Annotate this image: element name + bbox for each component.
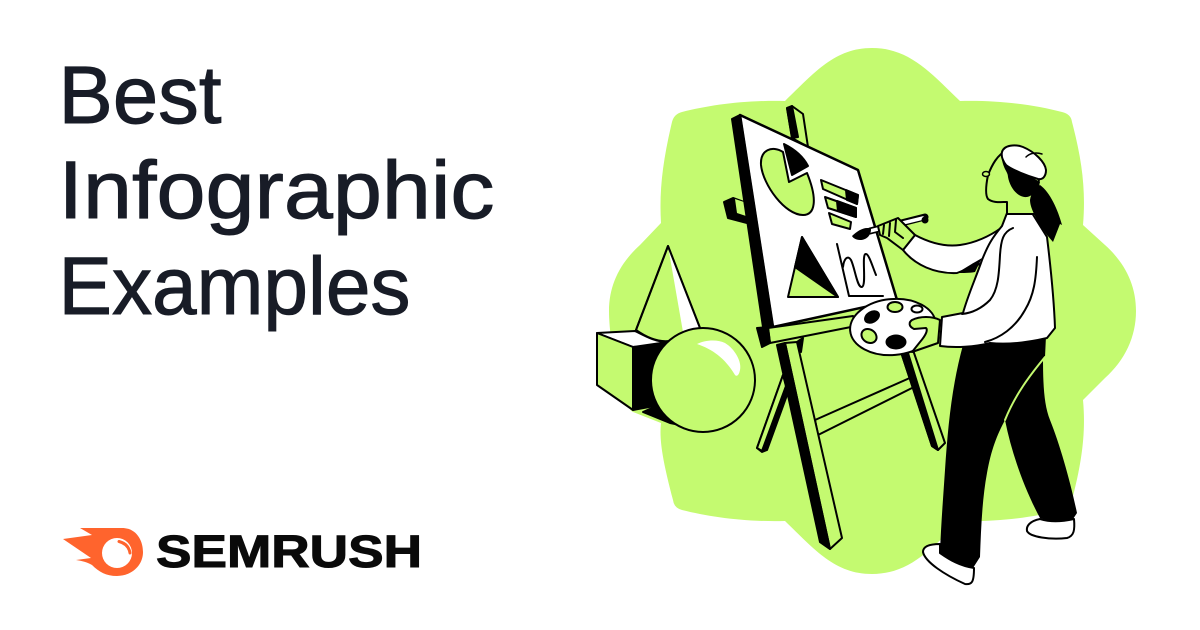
title: Examples	[58, 241, 410, 332]
ponytail	[1030, 185, 1062, 242]
logo: Semrush	[63, 526, 422, 577]
canvas	[732, 115, 897, 327]
paintbrush	[852, 216, 928, 240]
beret	[1002, 145, 1046, 179]
illustration: artist at easel	[597, 106, 1077, 584]
arm with sleeve	[903, 228, 1001, 273]
cube	[597, 331, 680, 425]
trousers	[940, 336, 1077, 568]
line chart	[837, 244, 883, 296]
palette	[848, 295, 938, 359]
hair	[1002, 160, 1040, 197]
sphere	[651, 328, 755, 432]
right easel leg	[902, 350, 945, 450]
easel mast top	[787, 106, 808, 147]
glasses	[982, 172, 990, 176]
bars	[821, 180, 858, 229]
easel ledge	[757, 316, 856, 347]
painting hand	[878, 218, 915, 250]
wordmark: SEMRUSH	[156, 526, 422, 577]
rear left easel leg	[757, 375, 787, 452]
title	[58, 50, 495, 332]
cone	[636, 246, 700, 341]
pie chart	[761, 144, 814, 215]
title: Infographic	[58, 145, 495, 236]
torso and sleeve	[940, 213, 1055, 347]
icon: comet	[63, 528, 143, 576]
artist	[848, 145, 1077, 584]
shoes	[923, 519, 1074, 584]
main easel leg	[777, 338, 842, 549]
triangle chart	[788, 237, 838, 297]
canvas board	[740, 115, 897, 327]
head	[986, 150, 1040, 214]
crossbar	[815, 377, 914, 435]
easel side peg	[724, 198, 747, 223]
title: Best	[58, 50, 222, 141]
green background blob	[609, 48, 1136, 574]
palette hand	[910, 317, 940, 352]
